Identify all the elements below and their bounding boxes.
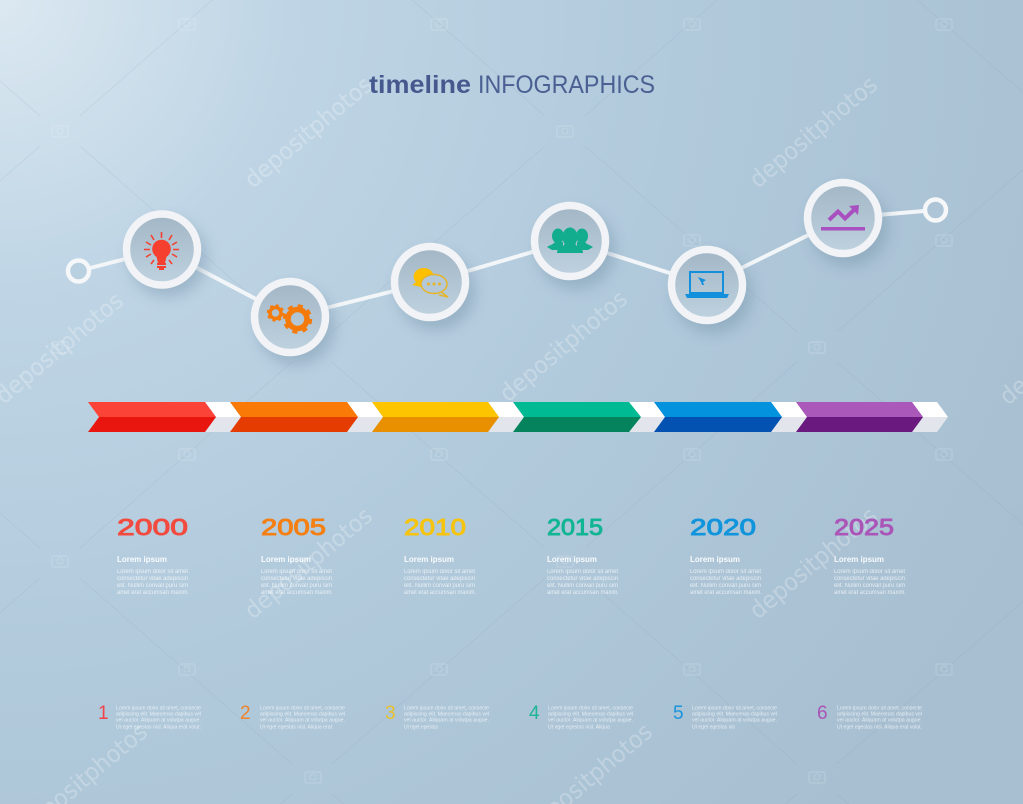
column 2020: Lorem ipsum <box>690 554 740 564</box>
column 2010: 2010 <box>404 514 466 540</box>
node 2: settings <box>254 282 335 365</box>
segment 2025 <box>796 402 923 432</box>
note 1: 1 <box>98 703 109 724</box>
watermark marks: depositphotos <box>744 71 883 194</box>
note 3: adipiscing elit. Maecenas dapibus vel <box>404 712 489 718</box>
note 6: Ut eget egestas nisl. Aliqua erat volut. <box>837 724 922 730</box>
column 2015 <box>547 514 619 596</box>
segment 2010 <box>372 402 499 432</box>
note 4: vel auctor. Aliquam at volutpa augue. <box>548 718 633 724</box>
column 2025: consectetur vitae adepiscin <box>834 576 905 582</box>
note 2 <box>240 703 345 730</box>
watermark marks: depositphotos <box>494 285 633 408</box>
icon: rising arrow <box>821 205 865 230</box>
column 2015: Lorem ipsum dolor sit amet <box>547 569 618 575</box>
column 2000: consectetur vitae adepiscin <box>117 576 188 582</box>
note 4: adipiscing elit. Maecenas dapibus vel <box>548 712 633 718</box>
node 4: team <box>534 206 615 289</box>
node 1: idea <box>126 214 207 297</box>
node 3: chat <box>394 246 475 330</box>
end node <box>925 200 946 220</box>
note 2: adipiscing elit. Maecenas dapibus vel <box>260 712 345 718</box>
note 4: Ut eget egestas nisl. Aliqua <box>548 724 610 730</box>
icon: speech bubbles <box>412 268 448 297</box>
note 1: Ut eget egestas nisl. Aliqua erat volut. <box>116 724 201 730</box>
column 2010: amet erat accumsan maxim. <box>404 590 476 596</box>
column 2020: Lorem ipsum dolor sit amet <box>690 569 761 575</box>
note 4 <box>529 703 633 730</box>
note 3: Lorem ipsum dolor sit amet, consecte <box>404 706 489 712</box>
note 2: Ut eget egestas nisl. Aliqua erat <box>260 724 333 730</box>
note 6: Lorem ipsum dolor sit amet, consecte <box>837 706 922 712</box>
column 2025: amet erat accumsan maxim. <box>834 590 906 596</box>
note 3: Ut eget egestas <box>404 724 438 730</box>
note 5: Lorem ipsum dolor sit amet, consecte <box>692 706 777 712</box>
note 1: Lorem ipsum dolor sit amet, consecte <box>116 706 201 712</box>
column 2020 <box>690 514 762 596</box>
column 2010: elit. Nullim convall puru sim <box>404 583 475 589</box>
note 2: vel auctor. Aliquam at volutpa augue. <box>260 718 345 724</box>
column 2000: elit. Nullim convall puru sim <box>117 583 188 589</box>
column 2000: 2000 <box>117 514 188 540</box>
column 2020: consectetur vitae adepiscin <box>690 576 761 582</box>
segment 2020 <box>654 402 782 432</box>
note 5: 5 <box>673 703 684 724</box>
note 1 <box>98 703 201 730</box>
title: timeline <box>369 71 471 99</box>
watermark marks: depositphotos <box>239 71 378 194</box>
icon: people <box>547 228 593 253</box>
column 2010: consectetur vitae adepiscin <box>404 576 475 582</box>
note 1: vel auctor. Aliquam at volutpa augue. <box>116 718 201 724</box>
column 2025: Lorem ipsum dolor sit amet <box>834 569 905 575</box>
note 4: 4 <box>529 703 540 724</box>
note 2: Lorem ipsum dolor sit amet, consecte <box>260 706 345 712</box>
note 3: 3 <box>385 703 396 724</box>
column 2000: amet erat accumsan maxim. <box>117 590 189 596</box>
column 2020: 2020 <box>690 514 756 540</box>
column 2010: Lorem ipsum <box>404 554 454 564</box>
column 2015: consectetur vitae adepiscin <box>547 576 618 582</box>
column 2015: amet erat accumsan maxim. <box>547 590 619 596</box>
watermark marks: depositphotos <box>239 502 378 625</box>
note 5 <box>673 703 777 730</box>
column 2025: 2025 <box>834 514 894 540</box>
note 3 <box>385 703 489 730</box>
column 2025 <box>834 514 906 596</box>
note 6 <box>817 703 922 730</box>
column 2015: Lorem ipsum <box>547 554 597 564</box>
column 2025: elit. Nullim convall puru sim <box>834 583 905 589</box>
note 6: 6 <box>817 703 828 724</box>
column 2005 <box>261 514 333 596</box>
column 2010 <box>404 514 476 596</box>
note 2: 2 <box>240 703 251 724</box>
column 2005: consectetur vitae adepiscin <box>261 576 332 582</box>
column 2005: Lorem ipsum dolor sit amet <box>261 569 332 575</box>
note 5: vel auctor. Aliquam at volutpa augue. <box>692 718 777 724</box>
node 6: growth chart <box>808 182 888 266</box>
node 5: laptop <box>672 250 752 333</box>
icon: light bulb <box>144 232 179 270</box>
note 6: vel auctor. Aliquam at volutpa augue. <box>837 718 922 724</box>
title <box>369 71 655 99</box>
column 2010: Lorem ipsum dolor sit amet <box>404 569 475 575</box>
column 2015: 2015 <box>547 514 603 540</box>
icon: laptop <box>685 272 729 298</box>
column 2020: elit. Nullim convall puru sim <box>690 583 761 589</box>
timeline connector line <box>78 210 936 317</box>
chevron ribbon <box>88 402 948 432</box>
column 2005: Lorem ipsum <box>261 554 311 564</box>
column 2005: elit. Nullim convall puru sim <box>261 583 332 589</box>
note 6: adipiscing elit. Maecenas dapibus vel <box>837 712 922 718</box>
watermark marks: depositphotos <box>744 502 883 625</box>
column 2015: elit. Nullim convall puru sim <box>547 583 618 589</box>
icon: gears <box>268 306 310 332</box>
white chevron separators <box>205 402 948 432</box>
column 2000: Lorem ipsum <box>117 554 167 564</box>
note 1: adipiscing elit. Maecenas dapibus vel <box>116 712 201 718</box>
segment 2015 <box>513 402 641 432</box>
title: INFOGRAPHICS <box>478 71 655 99</box>
column 2025: Lorem ipsum <box>834 554 884 564</box>
column 2005: 2005 <box>261 514 326 540</box>
note 4: Lorem ipsum dolor sit amet, consecte <box>548 706 633 712</box>
column 2020: amet erat accumsan maxim. <box>690 590 762 596</box>
note 5: Ut eget egestas nis <box>692 724 735 730</box>
note 3: vel auctor. Aliquam at volutpa augue. <box>404 718 489 724</box>
column 2005: amet erat accumsan maxim. <box>261 590 333 596</box>
column 2000: Lorem ipsum dolor sit amet <box>117 569 188 575</box>
note 5: adipiscing elit. Maecenas dapibus vel <box>692 712 777 718</box>
column 2000 <box>117 514 189 596</box>
start node <box>68 260 89 282</box>
segment 2000 <box>88 402 216 432</box>
segment 2005 <box>230 402 358 432</box>
